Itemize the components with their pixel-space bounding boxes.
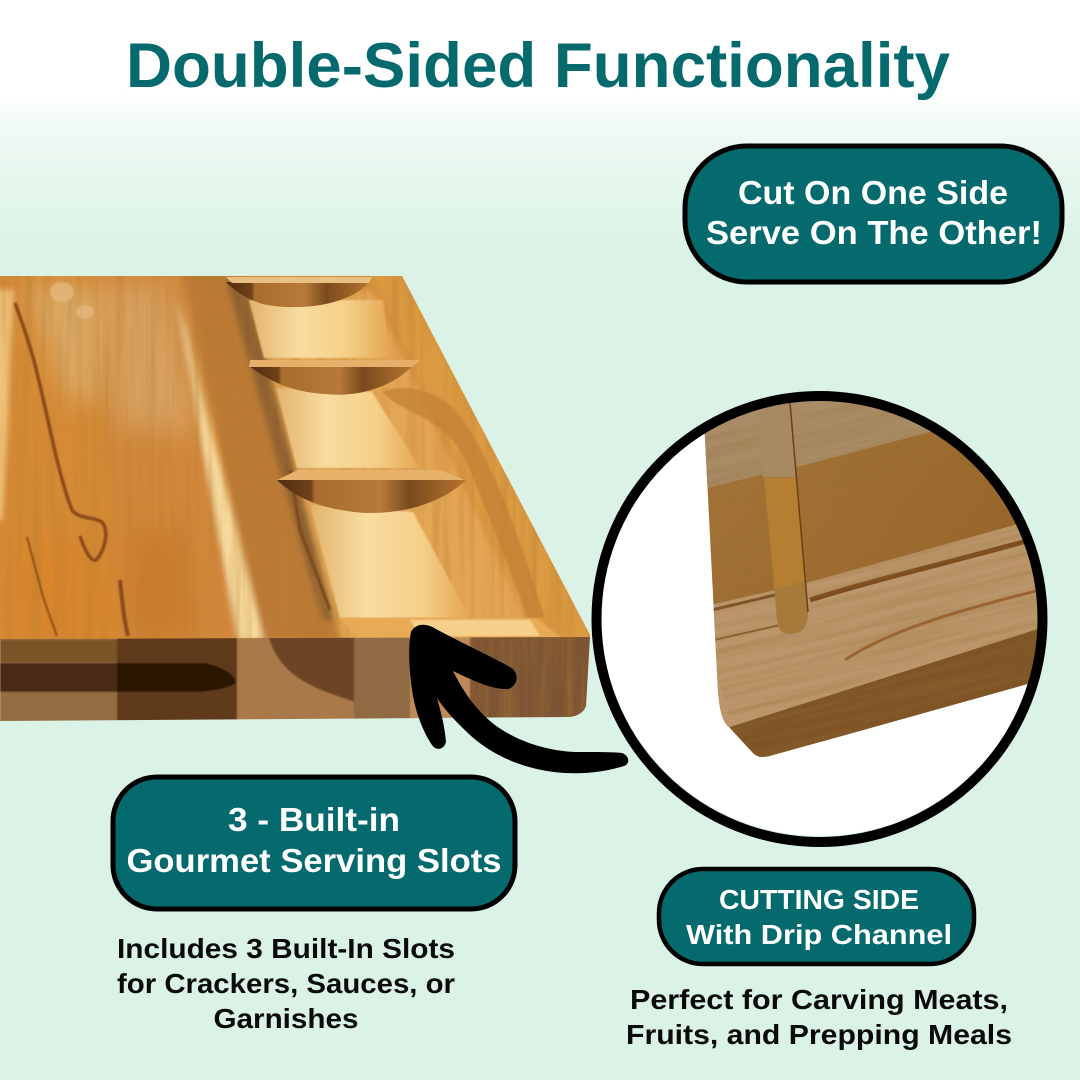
serving slots description: Includes 3 Built-In Slots: [117, 933, 455, 964]
callout: serving slots: Gourmet Serving Slots: [126, 842, 502, 879]
callout: cut and serve: Cut On One Side: [738, 174, 1008, 211]
callout: cut and serve: Serve On The Other!: [706, 214, 1042, 251]
callout: cutting side: CUTTING SIDE: [719, 884, 919, 915]
front edge: [730, 629, 1038, 757]
callout: serving slots: [113, 777, 515, 909]
arrow: [409, 625, 628, 773]
board top surface: [0, 270, 600, 645]
drip channel: [764, 477, 808, 634]
title: Double-Sided Functionality: [126, 31, 950, 101]
cutting side description: [626, 984, 1012, 1050]
callout: cutting side: With Drip Channel: [686, 919, 952, 950]
callout: serving slots: 3 - Built-in: [228, 801, 400, 838]
callout: cut and serve: [685, 146, 1062, 282]
cutting side description: Perfect for Carving Meats,: [630, 984, 1008, 1015]
wood grain: [0, 270, 600, 645]
cutting side description: Fruits, and Prepping Meals: [626, 1019, 1012, 1050]
serving slots: [226, 277, 466, 513]
serving slots description: Garnishes: [214, 1003, 358, 1034]
wooden serving board: [0, 270, 600, 725]
top pale wood: [704, 401, 930, 488]
board front edge: [0, 635, 595, 725]
soft tonal patches: [10, 285, 195, 640]
circular inset: cutting side: [592, 391, 1048, 847]
inset ring: [596, 396, 1042, 842]
serving slots description: for Crackers, Sauces, or: [117, 968, 455, 999]
lower pale grain: [714, 524, 1038, 727]
callout: cutting side: [659, 869, 974, 964]
slot panels: [249, 300, 470, 618]
serving slots description: [117, 933, 455, 1034]
